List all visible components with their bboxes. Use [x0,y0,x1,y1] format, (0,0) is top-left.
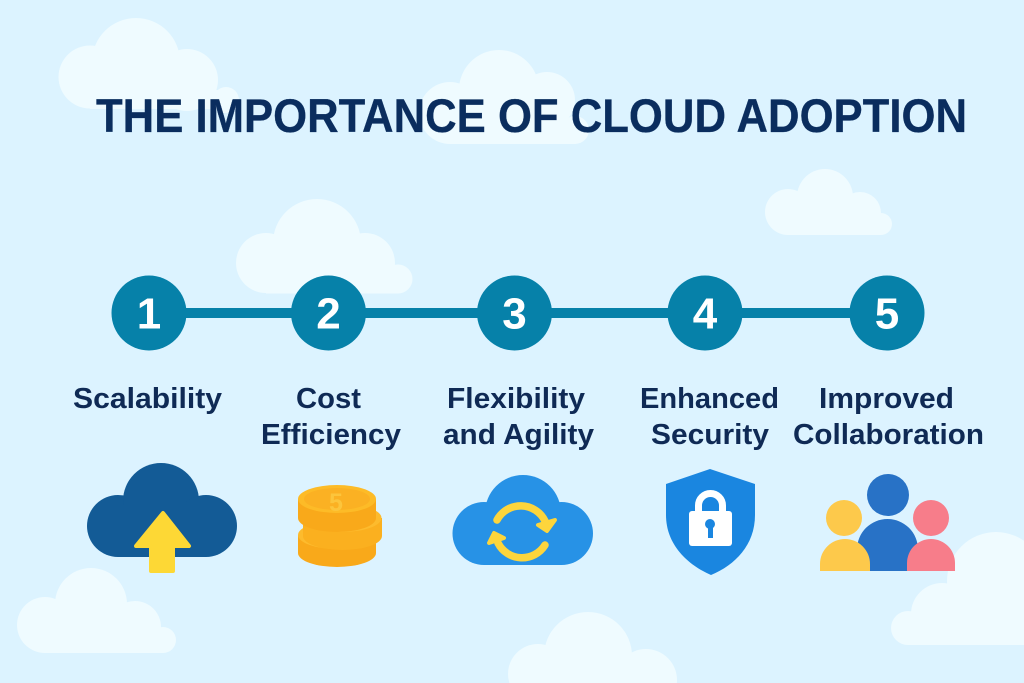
step 5 marker: 5 [875,290,899,338]
step 1 marker: 1 [137,290,161,338]
step 2 marker: 2 [316,290,341,338]
step 1 marker [112,276,186,350]
icon: team of three people [820,474,955,571]
icon: stack of coins [298,485,382,567]
label: Flexibility and Agility: and Agility [443,419,594,451]
icon: cloud with upload arrow [87,463,237,571]
step 4 marker: 4 [693,290,718,338]
label: Improved Collaboration: Improved [819,383,954,415]
background cloud: top left [58,18,239,113]
label: Flexibility and Agility: Flexibility [447,383,585,415]
label: Enhanced Security: Enhanced [640,383,779,415]
label: Cost Efficiency: Cost [296,383,361,415]
step 4 marker [668,276,742,350]
timeline connector line [149,308,887,318]
label: Enhanced Security: Security [651,419,769,451]
background cloud: middle left [236,199,412,294]
step 2 marker [291,276,366,350]
icon: cloud with sync arrows [452,475,593,565]
background cloud: bottom right [891,532,1024,645]
icon: stack of coins: 5 [329,489,343,517]
label: Scalability: Scalability [73,383,222,415]
label: Improved Collaboration: Collaboration [793,419,984,451]
title: THE IMPORTANCE OF CLOUD ADOPTION [96,89,967,142]
label: Improved Collaboration [793,383,984,451]
background cloud: bottom left [17,568,176,653]
label: Enhanced Security [640,383,779,451]
icon: security shield with padlock [666,469,755,575]
label: Cost Efficiency: Efficiency [261,419,401,451]
background cloud: top centre [419,50,589,144]
label: Cost Efficiency [261,383,401,451]
step 3 marker: 3 [502,290,527,338]
label: Flexibility and Agility [443,383,594,451]
background cloud: upper right [765,169,892,235]
background cloud: bottom centre [508,612,677,683]
step 5 marker [850,276,924,350]
step 3 marker [477,276,552,350]
